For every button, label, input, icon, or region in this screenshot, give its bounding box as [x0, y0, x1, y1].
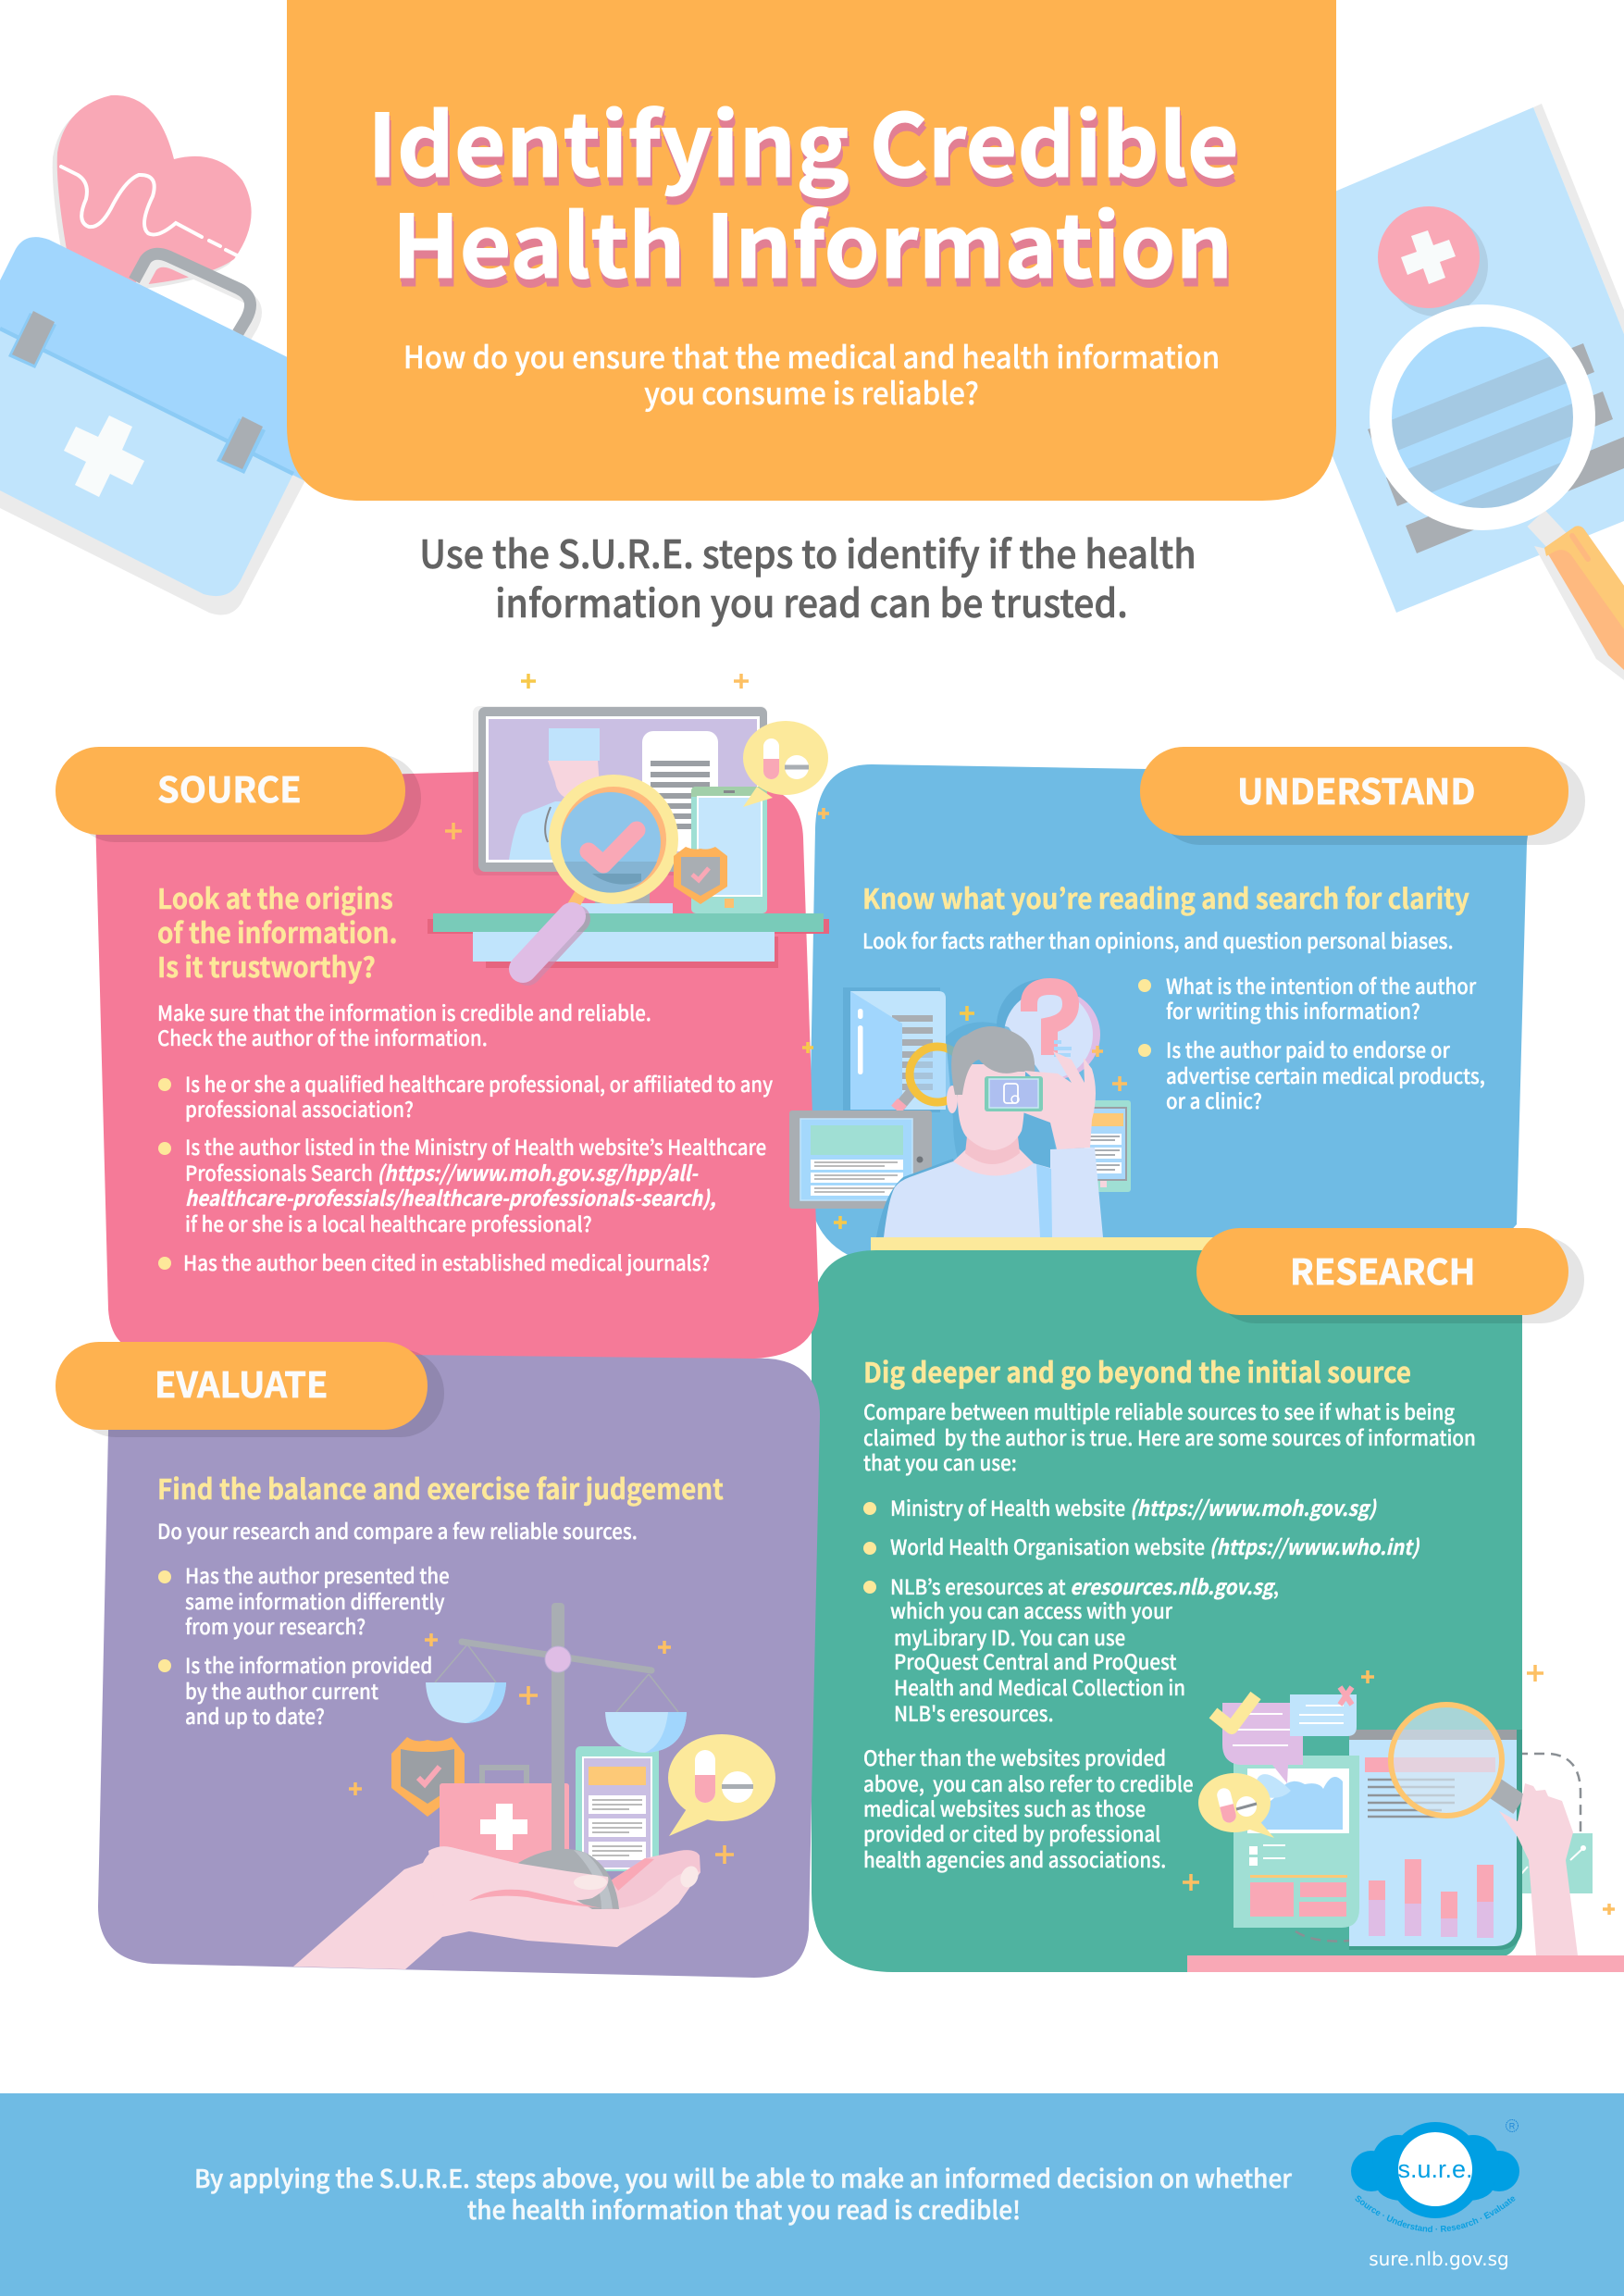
tablet behind reader	[1083, 1100, 1131, 1192]
icon: pink cross badge	[1378, 206, 1488, 316]
footer background	[0, 2093, 1624, 2296]
subtitle	[403, 334, 1220, 414]
panel: title banner	[287, 0, 1336, 501]
research bullet 3: myLibrary ID. You can use	[894, 1622, 1125, 1652]
research intro: claimed by the author is true. Here are some sources of information	[863, 1422, 1476, 1452]
document on screen	[642, 731, 718, 851]
research pill: RESEARCH	[1290, 1244, 1475, 1295]
evaluate bullet 1: same information differently	[185, 1586, 445, 1616]
sparkle	[1183, 1874, 1199, 1891]
source bullet 2: healthcare-professials/healthcare-professionals-search),	[185, 1183, 715, 1212]
research heading: Dig deeper and go beyond the initial source	[863, 1351, 1411, 1391]
understand heading: Know what you’re reading and search for clarity	[862, 877, 1469, 917]
understand bullet 1: What is the intention of the author	[1166, 971, 1476, 1000]
sparkle	[1527, 1665, 1543, 1682]
sparkle	[1092, 1046, 1103, 1057]
magnifying glass	[1391, 1705, 1519, 1816]
sparkle	[818, 808, 829, 819]
understand bullet 1	[1138, 971, 1476, 1025]
evaluate bullet 1	[158, 1560, 450, 1641]
pink table bar	[1187, 1955, 1624, 1972]
illustration: heart and first aid kit	[0, 95, 310, 615]
sparkle	[960, 1006, 974, 1021]
reader head and shoulders	[876, 1022, 1103, 1237]
source intro: Check the author of the information.	[157, 1023, 488, 1052]
S.U.R.E. logo	[1351, 2119, 1519, 2232]
understand bullet 2	[1138, 1035, 1485, 1115]
source bullet 2: Is the author listed in the Ministry of Health website’s Healthcare	[185, 1132, 766, 1161]
evaluate bullet 1: Has the author presented the	[185, 1560, 450, 1590]
source pill	[56, 747, 421, 842]
research bullet 3: Health and Medical Collection in	[894, 1672, 1185, 1702]
research bullet 3: NLB’s eresources at eresources.nlb.gov.sg,	[890, 1571, 1279, 1601]
evaluate intro: Do your research and compare a few reliable sources.	[157, 1516, 638, 1545]
research closing note	[863, 1743, 1194, 1874]
S.U.R.E. logo: R	[1509, 2121, 1516, 2130]
intro text: Use the S.U.R.E. steps to identify if the health	[419, 523, 1196, 579]
title	[367, 77, 1241, 312]
research bullet 3	[863, 1571, 1279, 1728]
footer band	[0, 2093, 1624, 2296]
balance scale	[426, 1603, 687, 1857]
illustration: hand with balance scale	[293, 1603, 775, 1969]
open hand	[293, 1846, 701, 1969]
evaluate heading: Find the balance and exercise fair judgement	[157, 1468, 724, 1508]
panel: evaluate text	[56, 1342, 724, 1731]
panel: understand text	[862, 747, 1585, 1115]
panel: source text	[56, 747, 773, 1277]
understand pill	[1140, 747, 1585, 845]
magnifier ring	[896, 1047, 965, 1110]
document with folder	[843, 987, 946, 1112]
research intro	[863, 1396, 1476, 1477]
source heading	[157, 877, 398, 986]
research bullet 3: ProQuest Central and ProQuest	[894, 1646, 1177, 1676]
icon: magnifier with check mark	[523, 775, 678, 972]
evaluate bullet 2: Is the information provided	[185, 1650, 432, 1680]
panel: research text	[863, 1228, 1584, 1874]
research bullet 1: Ministry of Health website (https://www.moh.gov.sg)	[890, 1493, 1378, 1522]
source heading: Look at the origins	[157, 877, 393, 917]
shelf	[428, 913, 829, 968]
sparkle	[425, 1633, 438, 1646]
research intro: that you can use:	[863, 1447, 1017, 1477]
intro text: information you read can be trusted.	[495, 572, 1128, 628]
tablet	[691, 787, 767, 913]
source intro	[157, 998, 651, 1052]
source bullet 2	[158, 1132, 766, 1238]
S.U.R.E. logo: Source · Understand · Research · Evaluate	[1355, 2195, 1516, 2232]
evaluate bullet 2	[158, 1650, 432, 1731]
icon: pill speech bubble	[743, 721, 828, 807]
title: Identifying Credible	[367, 77, 1239, 203]
title: Identifying Credible	[369, 85, 1241, 211]
icon: yellow check mark	[1213, 1695, 1256, 1728]
understand bullet 2: Is the author paid to endorse or	[1166, 1035, 1450, 1064]
footer message: By applying the S.U.R.E. steps above, you will be able to make an informed decision on whether	[194, 2159, 1292, 2195]
main browser document	[1349, 1730, 1522, 1950]
doctor figure	[509, 728, 663, 860]
illustration: source doctor on monitor with magnifier	[428, 674, 829, 972]
source heading: of the information.	[157, 912, 398, 951]
panel: understand background	[809, 764, 1536, 1263]
research bullet 2: World Health Organisation website (https://www.who.int)	[890, 1532, 1420, 1561]
illustration: reader holding phone	[789, 808, 1131, 1237]
panel: evaluate background	[98, 1349, 820, 1978]
intro text	[419, 523, 1196, 628]
pill speech bubble	[1198, 1773, 1274, 1838]
source pill: SOURCE	[157, 762, 302, 813]
icon: heart	[53, 95, 252, 290]
sparkle	[802, 1042, 813, 1053]
illustration: research documents and magnifier	[1183, 1665, 1624, 1972]
panel: source background	[95, 772, 819, 1359]
footer message	[194, 2159, 1292, 2227]
understand pill: UNDERSTAND	[1237, 763, 1476, 814]
evaluate bullet 2: and up to date?	[185, 1701, 325, 1731]
sparkles	[521, 674, 536, 689]
research bullet 3: which you can access with your	[890, 1595, 1172, 1625]
subtitle: How do you ensure that the medical and health information	[403, 334, 1220, 378]
source bullet 2: if he or she is a local healthcare professional?	[185, 1209, 592, 1238]
source heading: Is it trustworthy?	[157, 946, 376, 986]
source bullet 3: Has the author been cited in established medical journals?	[183, 1247, 710, 1277]
sparkle	[1361, 1670, 1374, 1683]
research closing note: Other than the websites provided	[863, 1743, 1166, 1772]
panel: research background	[812, 1250, 1522, 1972]
understand intro: Look for facts rather than opinions, and question personal biases.	[862, 925, 1454, 955]
title: Health Information	[394, 186, 1234, 312]
icon: magnifying glass lens	[1381, 316, 1584, 519]
research pill	[1196, 1228, 1584, 1323]
monitor stand	[577, 903, 673, 913]
sparkle	[349, 1782, 362, 1795]
question mark bubble	[997, 979, 1100, 1079]
evaluate bullet 2: by the author current	[185, 1676, 378, 1706]
subtitle: you consume is reliable?	[644, 370, 979, 414]
sparkle	[1603, 1904, 1615, 1915]
green page with chart	[1233, 1756, 1359, 1928]
first aid kit	[440, 1768, 569, 1871]
tablet in front	[789, 1111, 932, 1209]
illustration: document and magnifying glass	[1295, 104, 1624, 680]
website address: sure.nlb.gov.sg	[1369, 2248, 1509, 2270]
green line chart card	[1507, 1833, 1593, 1893]
source bullet 1: Is he or she a qualified healthcare professional, or affiliated to any	[185, 1069, 773, 1098]
banner background	[287, 0, 1336, 501]
S.U.R.E. logo: s.u.r.e.	[1397, 2155, 1473, 2183]
research closing note: above, you can also refer to credible	[863, 1769, 1194, 1798]
blue note with pink cross	[1290, 1687, 1357, 1736]
icon: first aid kit	[0, 237, 310, 615]
hand holding phone	[1018, 1051, 1096, 1149]
phone	[576, 1746, 659, 1871]
source bullet 2: Professionals Search (https://www.moh.gov.sg/hpp/all-	[185, 1158, 699, 1187]
footer message: the health information that you read is credible!	[467, 2191, 1021, 2227]
icon: phone with document	[985, 1076, 1043, 1111]
sparkle	[715, 1845, 734, 1864]
title: Identifying Credible	[368, 81, 1240, 206]
sparkle	[519, 1686, 538, 1705]
source bullet 1	[158, 1069, 773, 1123]
source bullet 1: professional association?	[185, 1094, 414, 1123]
decorative bar beneath reader	[871, 1237, 1222, 1251]
sparkle	[834, 1216, 847, 1229]
bar chart	[1369, 1859, 1494, 1938]
lilac chat bubble	[1222, 1703, 1303, 1783]
shield badge	[391, 1737, 465, 1817]
title: Health Information	[393, 181, 1233, 307]
sparkle	[658, 1641, 671, 1654]
evaluate pill	[56, 1342, 444, 1437]
evaluate bullet 1: from your research?	[185, 1611, 366, 1641]
hand with arm	[1499, 1783, 1578, 1955]
understand bullet 2: or a clinic?	[1166, 1086, 1262, 1115]
evaluate pill: EVALUATE	[155, 1357, 328, 1408]
sparkle	[1112, 1076, 1127, 1091]
research closing note: provided or cited by professional	[863, 1818, 1160, 1848]
monitor	[473, 706, 767, 904]
dashed connector	[1295, 1754, 1581, 1942]
research closing note: medical websites such as those	[863, 1793, 1146, 1823]
sparkle	[445, 823, 462, 839]
understand bullet 1: for writing this information?	[1166, 996, 1420, 1025]
magnifier handle	[1534, 518, 1624, 680]
source intro: Make sure that the information is credible and reliable.	[157, 998, 651, 1027]
sparkle	[734, 674, 749, 689]
research intro: Compare between multiple reliable sources to see if what is being	[863, 1396, 1456, 1426]
icon: shield check	[674, 847, 727, 904]
research bullet 3: NLB's eresources.	[894, 1698, 1054, 1728]
pill speech bubble	[668, 1734, 775, 1836]
title: Health Information	[392, 178, 1233, 304]
research closing note: health agencies and associations.	[863, 1844, 1166, 1874]
understand bullet 2: advertise certain medical products,	[1166, 1061, 1485, 1090]
